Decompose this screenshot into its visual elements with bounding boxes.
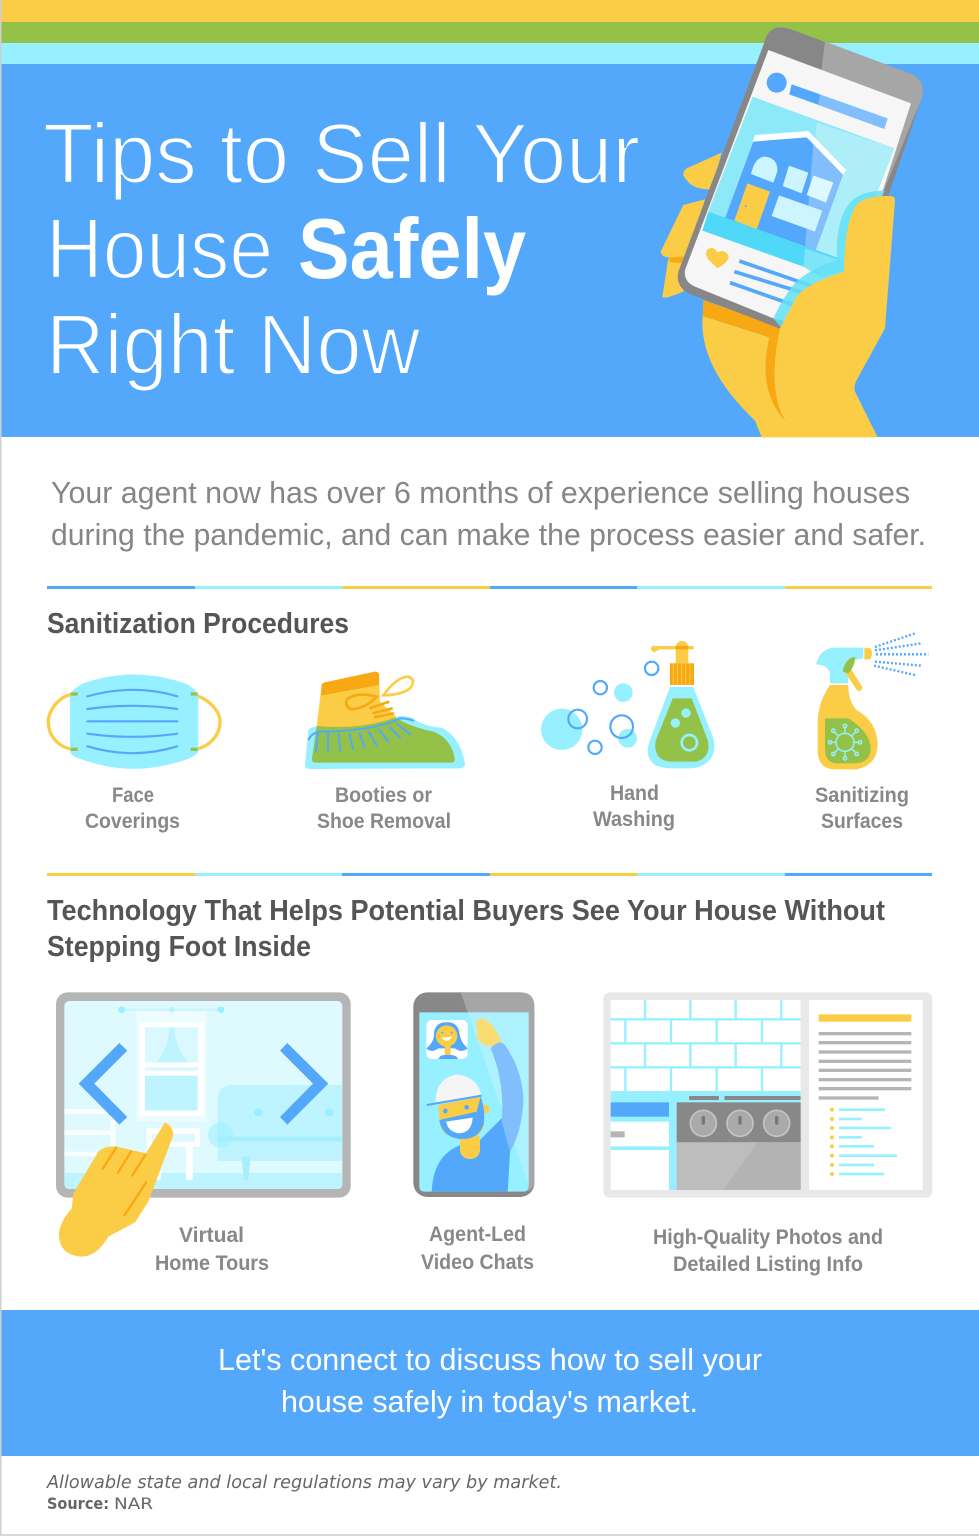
icon: soap bottle and bubbles <box>541 641 714 768</box>
label: virtual home tours <box>155 1224 269 1275</box>
label: hand washing: Hand <box>610 782 659 805</box>
label: hand washing: Washing <box>593 808 675 831</box>
title: Tips to Sell Your <box>43 107 640 202</box>
intro text <box>51 475 926 552</box>
call to action band: Let's connect to discuss how to sell your <box>218 1342 762 1377</box>
title: Safely <box>298 202 526 297</box>
label: face coverings: Face <box>112 784 154 807</box>
call to action band <box>1 1310 979 1456</box>
icon: boot with booties <box>305 672 465 769</box>
label: face coverings: Coverings <box>85 810 180 833</box>
intro text: during the pandemic, and can make the process easier and safer. <box>51 517 926 552</box>
call to action band: house safely in today's market. <box>281 1384 698 1419</box>
label: photos and listing: High-Quality Photos and <box>653 1226 883 1249</box>
label: face coverings <box>85 784 180 833</box>
label: photos and listing: Detailed Listing Info <box>673 1253 863 1276</box>
label: agent-led video chats <box>421 1223 534 1274</box>
label: booties <box>317 784 451 833</box>
icon: hand holding phone <box>661 27 923 437</box>
hero panel <box>1 0 979 437</box>
icon: spray bottle <box>816 633 928 769</box>
label: booties: Booties or <box>335 784 432 807</box>
title: House <box>46 202 273 297</box>
title <box>43 107 640 393</box>
heading: technology: Technology That Helps Potential Buyers See Your House Without <box>47 895 885 927</box>
heading: technology <box>47 895 885 963</box>
label: hand washing <box>593 782 675 831</box>
label: sanitizing surfaces: Sanitizing <box>815 784 909 807</box>
footer note <box>46 1472 562 1513</box>
icon: virtual tour tablet <box>56 992 351 1257</box>
icon: video chat phone <box>413 992 534 1197</box>
label: booties: Shoe Removal <box>317 810 451 833</box>
title: Right Now <box>46 298 421 393</box>
label: agent-led video chats: Video Chats <box>421 1251 534 1274</box>
label: agent-led video chats: Agent-Led <box>429 1223 526 1246</box>
intro text: Your agent now has over 6 months of experience selling houses <box>51 475 910 510</box>
icon: face mask <box>48 674 220 769</box>
footer note: Source: <box>47 1494 109 1513</box>
footer note: Allowable state and local regulations may vary by market. <box>46 1472 562 1493</box>
icon: kitchen photo and listing <box>603 992 932 1198</box>
footer note: NAR <box>114 1494 153 1513</box>
label: sanitizing surfaces <box>815 784 909 833</box>
label: virtual home tours: Home Tours <box>155 1252 269 1275</box>
label: sanitizing surfaces: Surfaces <box>821 810 903 833</box>
heading: technology: Stepping Foot Inside <box>47 931 311 963</box>
label: photos and listing <box>653 1226 883 1276</box>
heading: sanitization procedures: Sanitization Procedures <box>47 608 349 640</box>
label: virtual home tours: Virtual <box>179 1224 244 1247</box>
